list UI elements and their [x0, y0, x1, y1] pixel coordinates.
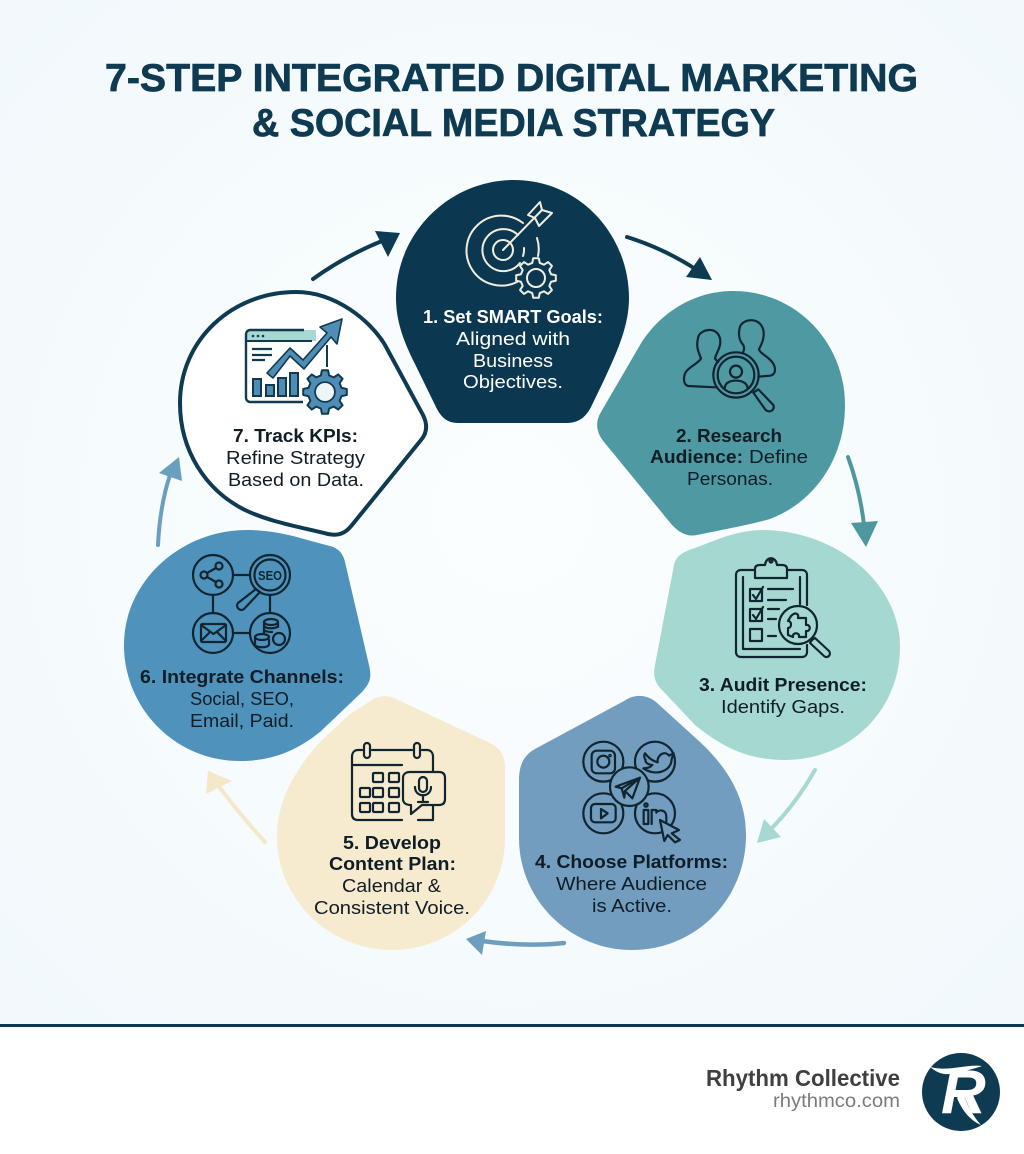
brand URL: rhythmco.com: [773, 1091, 900, 1112]
text: step 3: Identify Gaps.: [721, 696, 845, 717]
icon: people with magnifier: [684, 320, 775, 411]
text: step 5: Consistent Voice.: [314, 897, 470, 918]
brand name: Rhythm Collective: [706, 1065, 900, 1091]
arrow: step 2 to step 3: [848, 457, 878, 547]
icon label: SEO: SEO: [258, 568, 282, 583]
text: step 7: 7. Track KPIs:: [233, 425, 358, 446]
text: step 7: Refine Strategy: [226, 447, 366, 468]
panel: step 6 integrate channels: [124, 530, 370, 761]
text: step 6: 6. Integrate Channels:: [140, 666, 344, 687]
text: step 6: [140, 666, 344, 731]
text: step 4: Where Audience: [556, 873, 707, 894]
panel: step 7 track KPIs: [180, 292, 426, 535]
icon: analytics window with rising arrow and gear: [246, 319, 347, 414]
arrow: step 4 to step 5: [466, 931, 564, 955]
text: step 2: 2. Research: [676, 425, 782, 446]
text: step 6: Social, SEO,: [190, 688, 294, 709]
text: step 2: [650, 425, 808, 489]
title: [105, 57, 918, 145]
text: step 7: [226, 425, 366, 490]
text: step 5: Calendar &: [342, 875, 442, 896]
text: step 2: Personas.: [687, 468, 773, 489]
title: & SOCIAL MEDIA STRATEGY: [252, 102, 775, 145]
text: step 1: 1. Set SMART Goals:: [423, 306, 603, 327]
arrow: step 5 to step 6: [206, 771, 265, 842]
text: step 5: [314, 832, 470, 918]
text: step 1: Business: [473, 350, 553, 371]
text: step 2: Audience:: [650, 446, 743, 467]
text: step 4: 4. Choose Platforms:: [535, 851, 728, 872]
arrow: step 1 to step 2: [627, 237, 712, 280]
footer band: [0, 1024, 1024, 1154]
text: step 1: [423, 306, 603, 392]
icon: social platforms: [583, 742, 680, 842]
panel: step 2 research audience: [597, 291, 845, 536]
arrow: step 7 to step 1: [313, 231, 400, 279]
text: step 4: is Active.: [592, 895, 672, 916]
text: step 5: Content Plan:: [329, 853, 456, 874]
text: step 3: 3. Audit Presence:: [699, 674, 867, 695]
icon: target with arrow and gear: [467, 202, 556, 298]
text: step 1: Aligned with: [456, 328, 570, 349]
title: 7-STEP INTEGRATED DIGITAL MARKETING: [105, 57, 918, 100]
arrow: step 6 to step 7: [158, 457, 182, 545]
logo: R: [941, 1058, 986, 1127]
text: step 5: 5. Develop: [343, 832, 441, 853]
text: step 1: Objectives.: [463, 371, 563, 392]
panel: step 4 choose platforms: [519, 696, 746, 950]
text: step 6: Email, Paid.: [190, 710, 294, 731]
panel: step 5 develop content plan: [277, 696, 505, 950]
logo: [922, 1053, 1000, 1131]
panel: step 1 set SMART goals: [396, 180, 629, 423]
icon: calendar with microphone bubble: [352, 743, 445, 820]
arrow: step 3 to step 4: [757, 770, 815, 843]
text: step 3: [699, 674, 867, 717]
text: step 2: Define: [749, 446, 808, 467]
text: step 7: Based on Data.: [228, 469, 364, 490]
text: step 4: [535, 851, 728, 916]
panel: step 3 audit presence: [654, 530, 900, 760]
icon: connected channels: [193, 555, 290, 653]
icon: clipboard with magnifier: [736, 558, 830, 657]
